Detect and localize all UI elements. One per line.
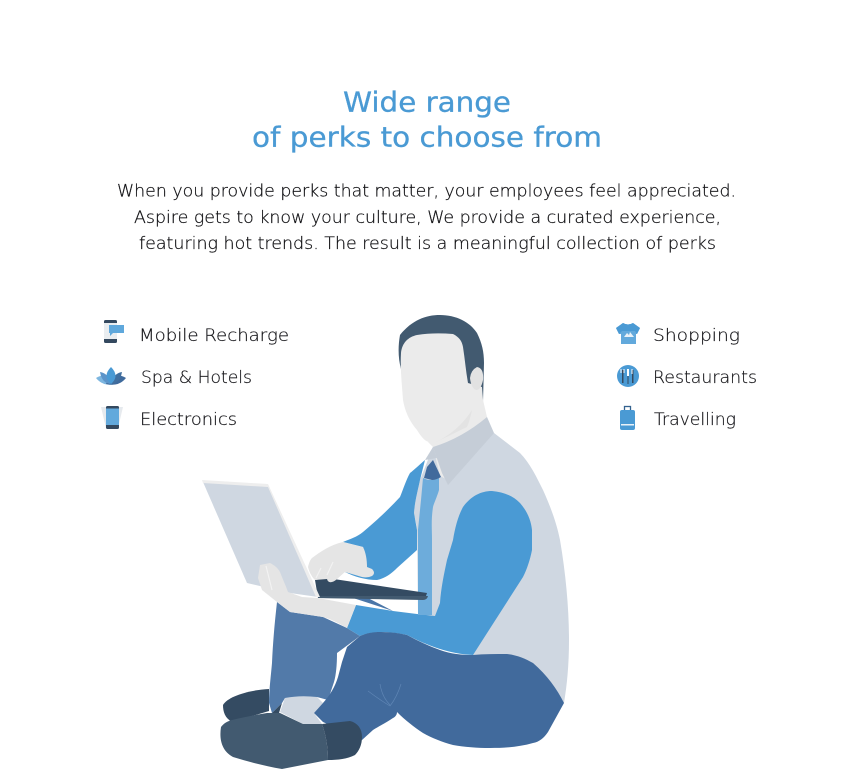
left sleeve	[343, 460, 425, 580]
icon: travelling suitcase	[620, 406, 635, 430]
tie knot	[424, 460, 441, 480]
icon: spa lotus	[96, 367, 126, 385]
label: spa and hotels: Spa & Hotels	[141, 368, 252, 388]
icon: shopping t-shirt	[616, 323, 640, 344]
icon: electronics phone	[101, 406, 123, 429]
right sleeve and torso	[347, 491, 532, 655]
ear	[470, 367, 483, 390]
perks list: right column	[616, 323, 757, 430]
sock	[280, 696, 323, 724]
back leg	[269, 602, 360, 713]
intro text block	[117, 182, 736, 253]
shoe toe	[322, 721, 362, 760]
title	[252, 86, 602, 154]
intro text block: When you provide perks that matter, your employees feel appreciated.	[117, 182, 736, 200]
trouser wrinkles	[368, 684, 401, 706]
intro text block: featuring hot trends. The result is a meaningful collection of perks	[139, 234, 716, 253]
back leg ankle shadow	[272, 703, 282, 713]
front trouser leg	[314, 632, 564, 748]
left collar	[425, 447, 437, 460]
label: restaurants: Restaurants	[653, 368, 757, 388]
hair	[399, 315, 484, 402]
lower hand	[258, 563, 356, 628]
face	[401, 333, 472, 442]
icon: restaurants plate	[617, 365, 639, 387]
jaw shadow	[434, 410, 472, 443]
illustration: man sitting with laptop	[202, 315, 569, 769]
upper hand	[308, 542, 374, 582]
tie	[418, 478, 439, 615]
icon: mobile recharge	[104, 320, 124, 343]
front shoe	[220, 713, 328, 769]
label: electronics: Electronics	[140, 410, 237, 430]
title: of perks to choose from	[252, 122, 602, 154]
label: travelling: Travelling	[654, 410, 736, 430]
label: mobile recharge: Mobile Recharge	[139, 326, 289, 346]
finger detail	[266, 562, 333, 590]
label: shopping: Shopping	[653, 326, 740, 346]
laptop underside	[350, 597, 393, 611]
back shoe	[223, 689, 269, 722]
neck	[428, 383, 487, 480]
laptop rim	[202, 480, 320, 597]
shirt body	[414, 433, 569, 703]
title: Wide range	[343, 86, 511, 118]
collar	[433, 417, 494, 485]
laptop base	[315, 578, 427, 599]
perks list: left column	[96, 320, 289, 430]
intro text block: Aspire gets to know your culture, We provide a curated experience,	[134, 208, 721, 227]
laptop screen	[203, 482, 318, 597]
